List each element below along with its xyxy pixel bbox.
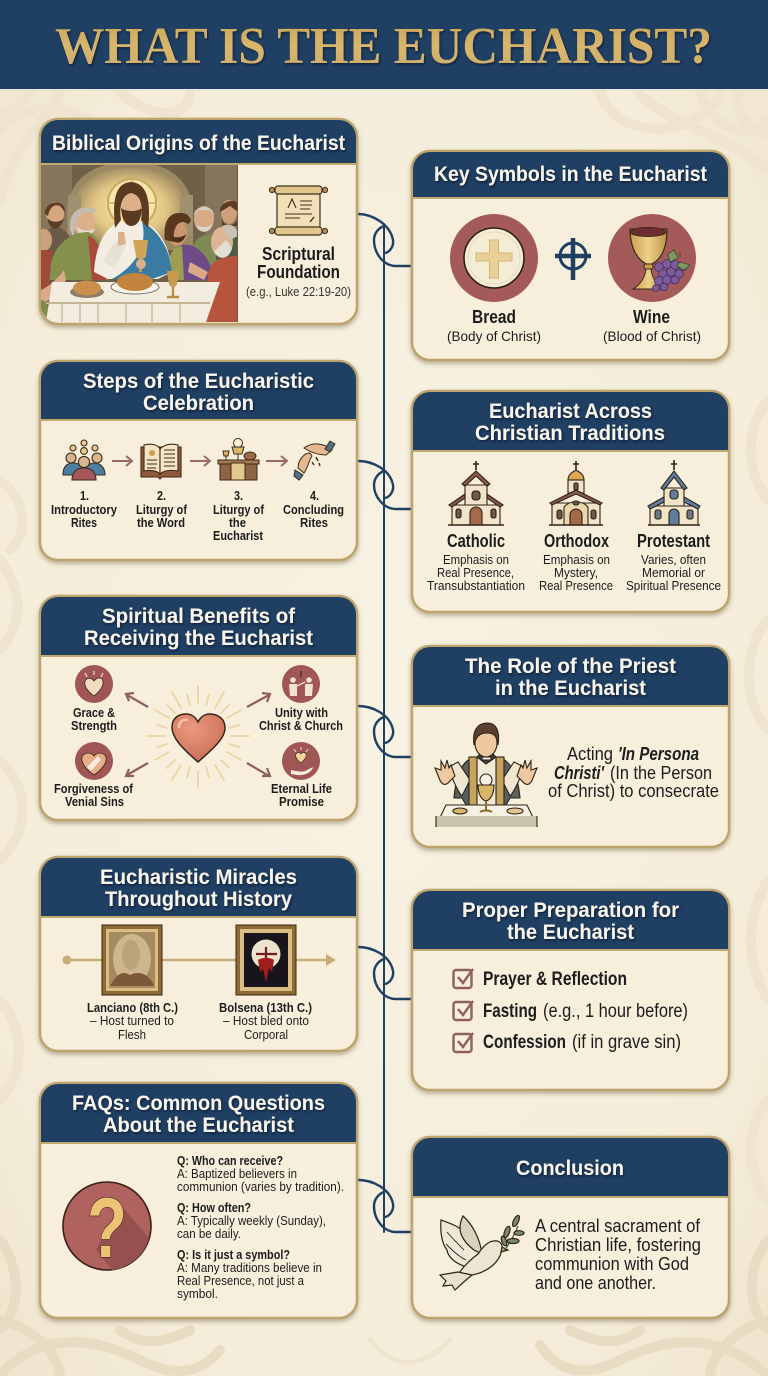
icon: priest at altar — [435, 723, 537, 827]
caption: bolsena: – Host bled onto — [223, 1013, 309, 1028]
checklist: Fasting — [483, 1001, 537, 1022]
caption: bolsena — [219, 1000, 312, 1042]
icon: grace — [75, 665, 113, 703]
timeline arrow — [62, 954, 336, 966]
faq text: A: Typically weekly (Sunday), — [177, 1213, 326, 1228]
column: orthodox: Orthodox — [544, 531, 609, 551]
column: orthodox: Real Presence — [539, 578, 613, 593]
column: orthodox: Mystery, — [554, 565, 598, 580]
label: bread: Bread — [472, 307, 516, 327]
heading: The Role of the Priest — [465, 655, 676, 678]
conclusion text: and one another. — [535, 1273, 656, 1293]
heading: Throughout History — [105, 888, 292, 911]
conclusion text: communion with God — [535, 1254, 689, 1274]
heading — [100, 866, 297, 911]
column: catholic: Emphasis on — [443, 552, 509, 567]
icon: host bread — [450, 214, 538, 302]
icon: scroll — [269, 186, 328, 235]
priest description: of Christ) to consecrate — [548, 781, 719, 801]
icon: question mark: ? — [87, 1181, 127, 1276]
faq text — [177, 1153, 344, 1301]
faq text: A: Many traditions believe in — [177, 1260, 322, 1275]
timeline spine and connectors — [358, 214, 412, 1232]
priest description: Christi' — [554, 763, 605, 783]
checklist: Confession — [483, 1032, 566, 1053]
label: wine — [603, 307, 701, 344]
arrow — [112, 456, 132, 466]
icon: lanciano relic frame — [102, 925, 162, 995]
faq text: Real Presence, not just a — [177, 1273, 305, 1288]
panel: eucharistic miracles — [40, 857, 357, 1051]
priest description: Acting — [567, 744, 613, 764]
step labels: 2. — [157, 488, 166, 503]
heading: Biblical Origins of the Eucharist — [52, 132, 345, 155]
panel: christian traditions — [412, 391, 729, 612]
icon: altar — [218, 438, 259, 480]
heading — [465, 655, 676, 700]
column: catholic: Real Presence, — [437, 565, 514, 580]
step labels — [51, 488, 344, 543]
heading: Receiving the Eucharist — [84, 627, 313, 650]
step labels: Introductory — [51, 502, 118, 517]
arrows from heart — [126, 693, 270, 776]
icon: forgiveness — [75, 742, 113, 780]
caption: lanciano: Flesh — [118, 1027, 146, 1042]
benefit labels: Christ & Church — [259, 718, 343, 733]
conclusion text: A central sacrament of — [535, 1216, 701, 1236]
panel: spiritual benefits — [40, 596, 357, 820]
heading: Eucharist Across — [489, 400, 652, 423]
icon: bolsena relic frame — [236, 925, 296, 995]
heading — [72, 1092, 325, 1137]
benefit labels: Forgiveness of — [54, 781, 134, 796]
caption: lanciano: Lanciano (8th C.) — [87, 1000, 178, 1015]
caption: bolsena: Corporal — [244, 1027, 288, 1042]
step labels: the Word — [137, 515, 185, 530]
icon: radiant heart — [147, 686, 249, 787]
benefit labels: Promise — [279, 794, 324, 809]
faq text: symbol. — [177, 1286, 218, 1301]
priest description: (In the Person — [610, 763, 712, 783]
step labels: 4. — [310, 488, 319, 503]
icon: celtic cross — [555, 238, 591, 280]
panel: proper preparation — [412, 890, 729, 1090]
arrow — [190, 456, 210, 466]
panel: key symbols — [412, 151, 729, 360]
column: protestant: Varies, often — [641, 552, 706, 567]
disciples right — [194, 206, 214, 232]
faq text: A: Baptized believers in — [177, 1166, 297, 1181]
table — [46, 282, 220, 322]
step labels: Concluding — [283, 502, 344, 517]
column: orthodox — [539, 531, 613, 593]
benefit labels: Venial Sins — [65, 794, 124, 809]
icon: eternal life — [282, 742, 320, 780]
caption: lanciano: – Host turned to — [90, 1013, 174, 1028]
benefit labels: Grace & — [73, 705, 115, 720]
heading: Eucharistic Miracles — [100, 866, 297, 889]
heading — [84, 605, 313, 650]
label: wine: (Blood of Christ) — [603, 328, 701, 344]
title banner — [0, 0, 768, 90]
scripture caption: Foundation — [257, 262, 340, 282]
icon: chalice and grapes — [608, 214, 696, 302]
disciples left — [48, 227, 70, 240]
faq text: Q: Who can receive? — [177, 1153, 283, 1168]
scripture caption: Scriptural — [262, 244, 335, 264]
heading: FAQs: Common Questions — [72, 1092, 325, 1115]
faq text: Q: Is it just a symbol? — [177, 1247, 290, 1262]
heading: Steps of the Eucharistic — [83, 370, 314, 393]
benefit labels: Strength — [71, 718, 117, 733]
icon: open book — [141, 444, 181, 479]
benefit labels: Eternal Life — [271, 781, 332, 796]
heading: Christian Traditions — [475, 422, 665, 445]
heading: Key Symbols in the Eucharist — [434, 163, 707, 186]
step labels: 3. — [234, 488, 243, 503]
step labels: Rites — [300, 515, 328, 530]
heading: Conclusion — [516, 1157, 624, 1180]
column: protestant: Protestant — [637, 531, 710, 551]
priest description — [548, 744, 719, 801]
label: bread: (Body of Christ) — [447, 328, 541, 344]
bread and cup — [111, 280, 159, 294]
column: orthodox: Emphasis on — [543, 552, 610, 567]
heading: Celebration — [143, 392, 254, 415]
column: catholic — [427, 531, 525, 593]
heading: the Eucharist — [507, 921, 634, 944]
checklist: (if in grave sin) — [572, 1032, 681, 1053]
column: protestant: Memorial or — [642, 565, 706, 580]
jesus — [94, 222, 172, 279]
benefit labels: Unity with — [275, 705, 328, 720]
label: bread — [447, 307, 541, 344]
step labels: Liturgy of — [136, 502, 188, 517]
conclusion text: Christian life, fostering — [535, 1235, 701, 1255]
column: protestant — [626, 531, 721, 593]
icon: question mark — [63, 1181, 151, 1276]
icon: unity — [282, 665, 320, 703]
heading: About the Eucharist — [103, 1114, 294, 1137]
icon: checkboxes — [454, 969, 473, 1052]
panel: biblical origins — [36, 119, 357, 324]
last supper illustration — [36, 165, 238, 322]
priest description: 'In Persona — [618, 744, 699, 764]
icon: congregation — [63, 440, 105, 480]
arrow — [266, 456, 287, 466]
benefit labels — [54, 705, 343, 809]
step labels: the — [229, 515, 246, 530]
icon: catholic church — [448, 461, 504, 525]
column: catholic: Transubstantiation — [427, 578, 525, 593]
column: protestant: Spiritual Presence — [626, 578, 721, 593]
faq text: Q: How often? — [177, 1200, 251, 1215]
title: WHAT IS THE EUCHARIST? — [55, 18, 712, 75]
step labels: Eucharist — [213, 528, 264, 543]
panel: conclusion — [412, 1137, 729, 1318]
icon: blessing hands — [294, 441, 335, 480]
step labels: 1. — [80, 488, 89, 503]
icon: dove with olive branch — [440, 1215, 524, 1290]
scripture caption — [246, 244, 351, 299]
heading — [462, 899, 679, 944]
checklist: Prayer & Reflection — [483, 969, 627, 990]
panel: faqs — [40, 1083, 357, 1318]
icon: orthodox church — [549, 461, 603, 525]
checklist — [454, 969, 688, 1053]
faq text: can be daily. — [177, 1226, 241, 1241]
column: catholic: Catholic — [447, 531, 505, 551]
heading — [83, 370, 314, 415]
heading: Spiritual Benefits of — [102, 605, 296, 628]
step labels: Rites — [71, 515, 97, 530]
step labels: Liturgy of — [213, 502, 265, 517]
faq text: communion (varies by tradition). — [177, 1179, 344, 1194]
panel: role of the priest — [412, 646, 729, 847]
panel: steps of the celebration — [40, 361, 357, 560]
heading: Proper Preparation for — [462, 899, 679, 922]
label: wine: Wine — [633, 307, 670, 327]
heading — [475, 400, 665, 445]
icon: protestant church — [648, 460, 700, 525]
conclusion text — [535, 1216, 701, 1293]
caption: bolsena: Bolsena (13th C.) — [219, 1000, 312, 1015]
heading: in the Eucharist — [495, 677, 646, 700]
checklist: (e.g., 1 hour before) — [543, 1001, 688, 1022]
caption: lanciano — [87, 1000, 178, 1042]
scripture caption: (e.g., Luke 22:19-20) — [246, 284, 351, 299]
